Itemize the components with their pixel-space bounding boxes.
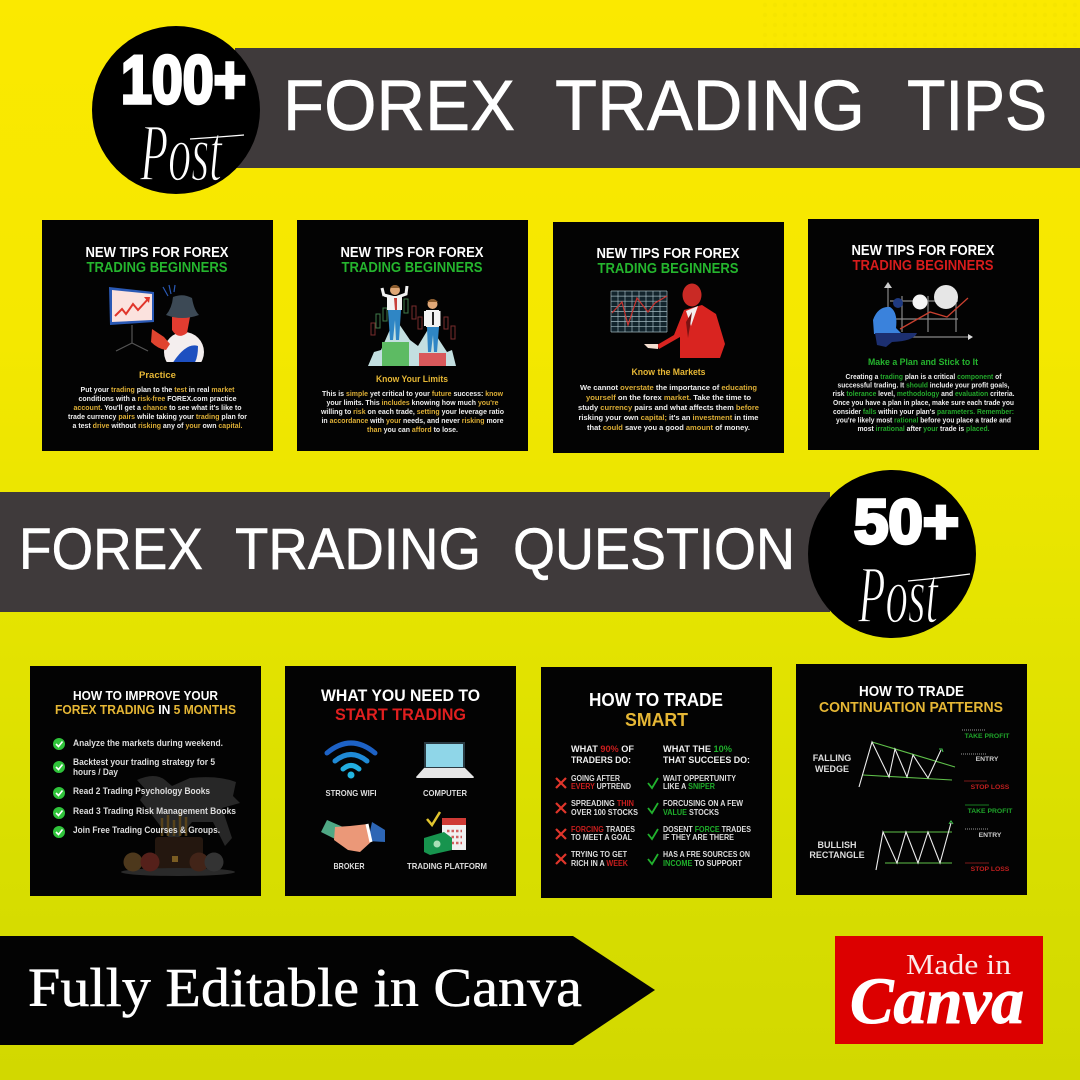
badge: made in canva (835, 936, 1043, 1044)
illustration: trader with crypto chart (873, 282, 973, 347)
footer arrow: fully editable in canva (0, 936, 655, 1045)
levels: bullish rectangle: ENTRY (979, 832, 1002, 839)
checklist: hours / Day (73, 767, 119, 777)
card heading: HOW TO TRADE (859, 684, 964, 700)
panel: tip card make a plan (808, 219, 1039, 450)
body text: conditions with a risk-free FOREX.com practice (78, 394, 236, 403)
body text: Once you have a plan in place, make sure each trade you (833, 398, 1014, 407)
illustration: businessman with grid chart (611, 284, 725, 358)
card heading (86, 245, 229, 276)
column: what 90 percent do: GOING AFTER (571, 774, 620, 783)
card heading: TRADING BEGINNERS (342, 260, 483, 276)
icon: laptop computer (416, 742, 474, 778)
label: computer: COMPUTER (423, 788, 467, 798)
heading band: forex trading tips (235, 48, 1080, 168)
footer arrow: fully editable in canva: Fully Editable in Canva (28, 957, 582, 1018)
body text: We cannot overstate the importance of educating (580, 383, 757, 392)
illustration: presenter at chart board (109, 284, 204, 362)
body text: than you can afford to lose. (367, 425, 458, 434)
body text: you're likely most rational before you place a trade and (836, 416, 1011, 424)
body text: account. You'll get a chance to see what it's like to (74, 403, 242, 412)
chart: bullish rectangle pattern (876, 821, 953, 870)
chart: falling wedge pattern (859, 742, 955, 787)
body text (832, 372, 1015, 433)
levels: bullish rectangle: TAKE PROFIT (968, 808, 1013, 815)
card heading (852, 243, 995, 274)
card heading: NEW TIPS FOR FOREX (340, 245, 484, 261)
card heading (55, 689, 236, 717)
levels: bullish rectangle (965, 805, 1013, 873)
badge: made in canva: Canva (850, 965, 1024, 1038)
label: bullish rectangle: BULLISH (818, 840, 856, 850)
icon: wifi (327, 743, 375, 778)
column: what 10 percent do: DOSENT FORCE TRADES (663, 825, 751, 834)
card heading: FOREX TRADING IN 5 MONTHS (55, 703, 236, 717)
label: trading platform: TRADING PLATFORM (407, 861, 487, 871)
card heading: SMART (625, 710, 688, 730)
badge: 50+ post (808, 470, 976, 640)
checklist: Analyze the markets during weekend. (73, 738, 223, 748)
body text: your limits. This includes knowing how much you're (326, 398, 498, 407)
icon: trading platform (424, 812, 466, 855)
column: what 90 percent do: EVERY UPTREND (571, 782, 631, 791)
badge: 100+ post (92, 26, 260, 198)
body text: Put your trading plan to the test in real market (80, 385, 235, 394)
body text (578, 383, 759, 432)
card heading (321, 686, 480, 724)
column: what 90 percent do: FORCING TRADES (571, 825, 635, 834)
card heading: NEW TIPS FOR FOREX (596, 246, 740, 262)
heading band: forex trading tips: TIPS (907, 67, 1047, 146)
column: what 90 percent do: TRADERS DO: (571, 755, 631, 766)
subheading: Practice (139, 370, 176, 381)
column: what 10 percent do: LIKE A SNIPER (663, 782, 715, 791)
body text: most irrational after your trade is placed. (858, 424, 989, 433)
panel: what you need to start trading (285, 666, 516, 896)
heading band: forex trading question: QUESTION (513, 517, 795, 582)
subheading: Know the Markets (632, 367, 706, 378)
card heading (819, 684, 1003, 716)
levels: falling wedge: TAKE PROFIT (965, 733, 1010, 740)
label: falling wedge: FALLING (813, 753, 851, 763)
body text: that could save you a good amount of money. (587, 423, 750, 432)
checklist: Read 3 Trading Risk Management Books (73, 806, 236, 816)
card heading: START TRADING (335, 705, 466, 724)
levels: bullish rectangle: STOP LOSS (971, 866, 1010, 873)
icon: handshake (321, 820, 385, 852)
body text: consider falls within your plan's parameters. Remember: (833, 407, 1014, 416)
label: strong wifi: STRONG WIFI (326, 788, 376, 798)
body text (68, 385, 247, 430)
panel: tip card know your limits (297, 220, 528, 451)
heading band: forex trading tips: FOREX (283, 67, 515, 146)
badge: made in canva: Made in (906, 950, 1011, 981)
card heading: TRADING BEGINNERS (598, 261, 739, 277)
label: falling wedge: WEDGE (815, 764, 849, 774)
column: what 10 percent do: HAS A FRE SOURCES ON (663, 850, 750, 859)
body text: trade currency pairs while taking your trading plan for (68, 412, 247, 421)
body text: successful trading. It should include your profit goals, (838, 380, 1010, 390)
card heading: NEW TIPS FOR FOREX (86, 245, 229, 261)
panel: continuation patterns (796, 664, 1027, 895)
levels: falling wedge: STOP LOSS (971, 784, 1010, 791)
world map and briefcase watermark (121, 776, 240, 876)
checklist: Backtest your trading strategy for 5 (73, 757, 215, 767)
card heading: HOW TO IMPROVE YOUR (73, 689, 218, 703)
panel: tip card know the markets (553, 222, 784, 453)
body text: a test drive without risking any of your own capital. (72, 421, 242, 430)
column: what 10 percent do: INCOME TO SUPPORT (663, 859, 742, 868)
column: what 90 percent do (556, 744, 638, 868)
column: what 90 percent do: SPREADING THIN (571, 799, 634, 808)
label: falling wedge (813, 753, 851, 774)
heading band: forex trading question: TRADING (235, 517, 481, 582)
badge: 50+ post: 50+ (854, 488, 959, 557)
label: bullish rectangle (809, 840, 865, 860)
heading band: forex trading tips: TRADING (555, 67, 865, 146)
column: what 10 percent do (648, 744, 751, 868)
levels: falling wedge (961, 730, 1010, 791)
badge: 100+ post: 100+ (121, 42, 246, 118)
panel: improve forex trading checklist (30, 666, 261, 896)
body text: risk tolerance level, methodology and evaluation criteria. (832, 389, 1015, 398)
column: what 90 percent do: OVER 100 STOCKS (571, 808, 638, 817)
body text: This is simple yet critical to your future success: know (322, 389, 503, 398)
body text: in accordance with your needs, and never risking more (322, 416, 504, 425)
column: what 10 percent do: WAIT OPPERTUNITY (663, 774, 737, 783)
body text: yourself on the forex market. Take the time to (586, 393, 751, 402)
label: broker: BROKER (334, 861, 364, 871)
card heading: WHAT YOU NEED TO (321, 686, 480, 705)
checklist: Join Free Trading Courses & Groups. (73, 825, 220, 835)
column: what 10 percent do: VALUE STOCKS (663, 808, 719, 817)
card heading: TRADING BEGINNERS (86, 260, 228, 276)
body text: Creating a trading plan is a critical component of (846, 372, 1002, 381)
illustration: traders on podiums with candlesticks (368, 285, 456, 366)
panel: how to trade smart (541, 667, 772, 898)
card heading (340, 245, 484, 276)
panel: tip card practice (42, 220, 273, 451)
card heading: HOW TO TRADE (589, 690, 723, 710)
column: what 10 percent do: WHAT THE 10% (663, 744, 732, 755)
label: bullish rectangle: RECTANGLE (809, 850, 865, 860)
subheading: Make a Plan and Stick to It (868, 357, 979, 368)
checklist: Read 2 Trading Psychology Books (73, 786, 210, 796)
column: what 90 percent do: TO MEET A GOAL (571, 833, 632, 842)
card heading (596, 246, 740, 277)
body text (320, 389, 504, 434)
column: what 90 percent do: TRYING TO GET (571, 850, 627, 859)
card heading: CONTINUATION PATTERNS (819, 700, 1003, 716)
heading band: forex trading question (0, 492, 830, 612)
body text: risking your own capital; it's an investment in time (578, 413, 758, 422)
card heading: TRADING BEGINNERS (852, 258, 994, 274)
levels: falling wedge: ENTRY (976, 756, 999, 763)
checklist (53, 738, 236, 838)
column: what 10 percent do: THAT SUCCEES DO: (663, 755, 750, 766)
badge: 100+ post: Post (139, 107, 223, 198)
card heading: NEW TIPS FOR FOREX (852, 243, 995, 259)
column: what 90 percent do: WHAT 90% OF (571, 744, 634, 755)
card heading (589, 690, 723, 730)
column: what 10 percent do: FORCUSING ON A FEW (663, 799, 744, 808)
badge: 50+ post: Post (857, 549, 939, 640)
subheading: Know Your Limits (376, 374, 448, 385)
heading band: forex trading question: FOREX (19, 517, 203, 582)
body text: study currency pairs and what affects them before (578, 403, 759, 412)
body text: willing to risk on each trade, setting your leverage ratio (320, 407, 504, 416)
column: what 10 percent do: IF THEY ARE THERE (663, 833, 734, 842)
column: what 90 percent do: RICH IN A WEEK (571, 859, 628, 868)
